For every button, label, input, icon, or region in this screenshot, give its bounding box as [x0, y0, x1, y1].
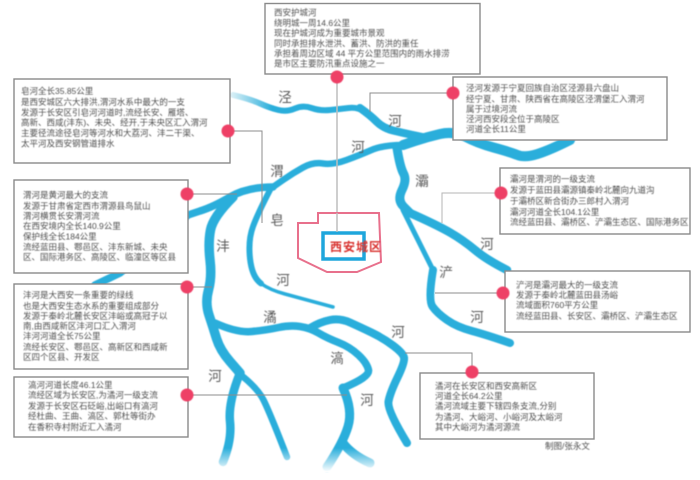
label: Jue he: 潏 [263, 310, 277, 325]
river: Ba [410, 213, 507, 270]
river: Wei [95, 133, 570, 285]
river labels [208, 90, 494, 408]
panel: Jing river: 经宁夏、甘肃、陕西省在高陵区泾渭堡汇入渭河 [466, 94, 645, 104]
panel: Feng river: 也是大西安生态水系的重要组成部分 [23, 301, 160, 311]
river: Lao [215, 323, 369, 388]
panel: Jue river: 潏河在长安区和西安高新区 [435, 381, 538, 391]
label: Zao he [270, 213, 290, 288]
panel: Chan river [505, 271, 690, 332]
city boundary [298, 213, 381, 272]
panel: Xi'an moat [265, 4, 480, 74]
credit: 制图/张永文 [545, 441, 590, 451]
label: Feng he: 沣 [216, 239, 230, 254]
label: Jing he: 泾 [278, 90, 292, 105]
panel: Jue river: 为潏河、大峪河、小峪河及太峪河 [435, 412, 563, 422]
panel: Jing river [453, 77, 667, 140]
river: Feng [207, 197, 287, 462]
panel: Chan river: 发源于秦岭北麓蓝田县汤峪 [516, 290, 619, 300]
river: Lu [403, 210, 510, 343]
label: Jing he [278, 90, 402, 129]
panel: Zao river: 主要径流途径皂河等河水和大荔河、沣二干渠、 [21, 128, 200, 138]
panel: Wei river: 在西安境内全长140.9公里 [23, 221, 121, 231]
label: Hao he: 河 [360, 393, 374, 408]
label: Wei he: 河 [351, 140, 365, 155]
panel: Jing river: 属于过境河流 [466, 104, 518, 114]
panel: Wei river: 渭河是黄河最大的支流 [23, 190, 109, 200]
label: Jue he: 河 [391, 325, 405, 340]
panel: Wei river [14, 180, 188, 273]
panel: Xi'an moat: 承担着周边区域 44 平方公里范围内的雨水排涝 [274, 48, 450, 58]
panel: Jue river: 潏河流域主要下辖四条支流,分别 [435, 401, 556, 411]
label: Chan he: 浐 [439, 265, 453, 280]
label: Ba he: 河 [480, 237, 494, 252]
panel: Feng river: 区四个区县、开发区 [23, 352, 100, 362]
panel: Wei river: 流经蓝田县、鄠邑区、沣东新城、未央 [23, 242, 168, 252]
label: Hao he [330, 351, 374, 408]
panel: Feng river: 沣河河道全长75公里 [23, 331, 101, 341]
panel: Chan river: 浐河是灞河最大的一级支流 [516, 280, 619, 290]
panel: Xi'an moat: 是市区主要防汛重点设施之一 [274, 58, 385, 68]
panel: Jue river: 河道全长64.2公里 [435, 391, 503, 401]
panel: Hao river: 流经区域为长安区,为潏河一级支流 [28, 390, 158, 400]
panel: Xi'an moat: 同时承担排水泄洪、蓄洪、防洪的重任 [274, 38, 419, 48]
label: Zao he: 河 [276, 273, 290, 288]
panel: Feng river: 南,由西咸新区沣河口汇入渭河 [23, 321, 136, 331]
label: Ba he: 灞 [415, 174, 429, 189]
panel: Wei river: 发源于甘肃省定西市渭源县鸟鼠山 [23, 201, 151, 211]
panel: Hao river: 发源于长安区石砭峪,出峪口有滈河 [28, 401, 158, 411]
panel: Feng river: 沣河是大西安一条重要的绿线 [23, 290, 134, 300]
panel: Zao river: 发源于长安区引皂河河道时,流经长安、雁塔、 [21, 108, 193, 118]
panel: Hao river: 经杜曲、王曲、滈区、郭杜等街办 [28, 411, 156, 421]
panel: Wei river: 区、国际港务区、高陵区、临潼区等区县 [23, 252, 177, 262]
panel: Ba river: 流经蓝田县、灞桥区、浐灞生态区、国际港务区 [510, 217, 689, 227]
label: Wei he: 渭 [270, 164, 284, 179]
panel: Jing river: 泾河发源于宁夏回族自治区泾源县六盘山 [466, 83, 619, 93]
panel: Zao river [14, 79, 230, 163]
panel: Xi'an moat: 现在护城河成为重要城市景观 [274, 28, 385, 38]
label: Wei he [270, 140, 365, 179]
panel: Wei river: 保护线全长184公里 [23, 232, 97, 242]
panel: Zao river: 太平河及西安钢管道排水 [21, 138, 115, 148]
panel: Ba river: 于灞桥区新合街办三郎村入渭河 [510, 196, 630, 206]
panel: Jing river: 河道全长11公里 [466, 124, 526, 134]
panel: Chan river: 流经蓝田县、长安区、灞桥区、浐灞生态区 [516, 311, 678, 321]
panel: Jing river: 泾河西安段全位于高陵区 [466, 114, 560, 124]
label: Chan he: 河 [470, 310, 484, 325]
panel: Xi'an moat: 西安护城河 [274, 8, 317, 18]
label: Feng he: 河 [208, 369, 222, 384]
panel: Feng river: 发源于秦岭北麓长安区沣峪或高冠子以 [23, 311, 168, 321]
panel: Wei river: 渭河横贯长安渭河流 [23, 211, 100, 221]
panel: Ba river: 发源于蓝田县灞源镇秦岭北麓向九道沟 [510, 185, 655, 195]
panel: Ba river: 灞河是渭河的一级支流 [510, 174, 596, 184]
panel: Feng river: 流经长安区、鄠邑区、高新区和西咸新 [23, 342, 168, 352]
panel: Hao river [14, 377, 188, 437]
label: Feng he [208, 239, 230, 384]
old town rectangle [323, 233, 364, 259]
label: Zao he: 皂 [270, 213, 284, 228]
river: Jue [310, 319, 407, 443]
map: Xi'an urban area [298, 213, 381, 272]
marker dots [180, 70, 510, 402]
city label: 西安城区 [330, 239, 381, 254]
river: Jing [233, 95, 427, 138]
panel: Feng river [14, 284, 188, 369]
panel: Jue river: 其中大峪河为潏河源流 [435, 422, 521, 432]
panel: Ba river [500, 168, 690, 234]
river network [95, 95, 570, 467]
label: Ba he [415, 174, 494, 252]
panel: Chan river: 流域面积760平方公里 [516, 300, 599, 310]
panel: Zao river: 皂河全长35.85公里 [21, 86, 94, 96]
connector lines [187, 77, 503, 395]
river: Zao [249, 190, 333, 307]
panel: Zao river: 是西安城区六大排洪,渭河水系中最大的一支 [21, 97, 185, 107]
panel: Xi'an moat: 绕明城一周14.6公里 [274, 18, 351, 28]
panel: Hao river: 滈河河道长度46.1公里 [28, 380, 113, 390]
label: Chan he [439, 265, 484, 325]
label: Jing he: 河 [388, 114, 402, 129]
panel: Zao river: 高新、西咸(沣东)、未央、经开,于未央区汇入渭河 [21, 118, 208, 128]
label: Jue he [263, 310, 405, 340]
panel: Ba river: 灞河河道全长104.1公里 [510, 207, 600, 217]
river: Hao [327, 388, 370, 467]
river fade at bottom [200, 448, 430, 472]
panel: Hao river: 在香积寺村附近汇入潏河 [28, 422, 122, 432]
panel: Jue river [420, 373, 594, 439]
river: Chan [397, 148, 410, 213]
label: Hao he: 滈 [330, 351, 344, 366]
